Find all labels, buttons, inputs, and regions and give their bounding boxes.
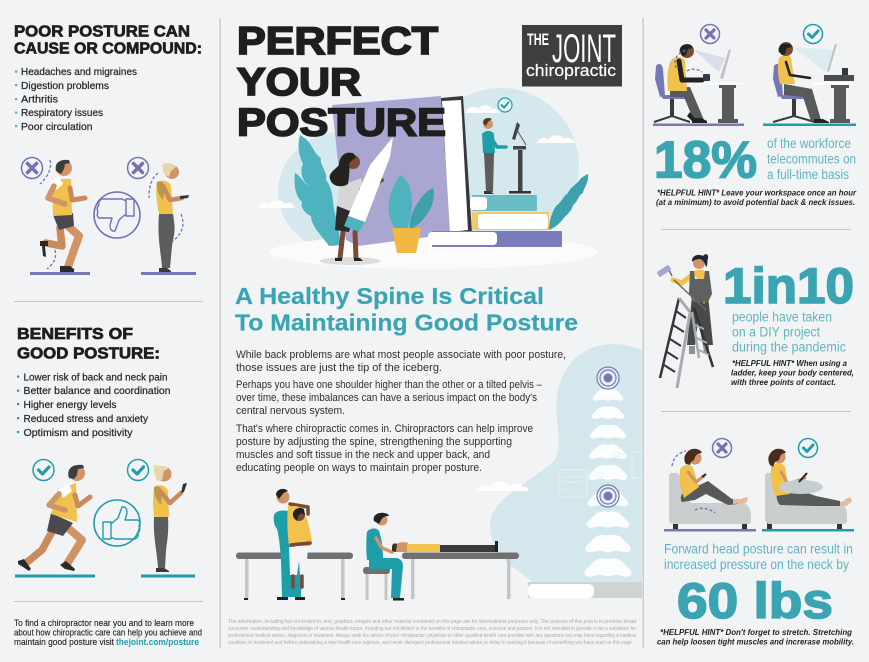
text block: body copy: Perhaps you have one shoulder higher than the other or a tilted pelvis – bbox=[236, 379, 542, 391]
disclaimer: condition or treatment and before undertaking a new health care regimen, and never disregard professional medical advice or delay in seeking it because of something you have read on this page. bbox=[228, 640, 633, 646]
icon: x mark bbox=[712, 438, 732, 458]
list: benefits: Better balance and coordination bbox=[24, 385, 171, 397]
figure: standing chiropractor with patient bbox=[274, 489, 312, 600]
list: problems caused by poor posture: Respiratory issues bbox=[21, 107, 103, 119]
text: workforce stat bbox=[767, 136, 856, 182]
figure: woman holding pencil bbox=[320, 137, 393, 265]
disclaimer bbox=[228, 619, 636, 646]
info card bbox=[559, 452, 642, 497]
vertebrae bbox=[584, 389, 632, 577]
text: DIY stat bbox=[732, 310, 846, 354]
icon: check bbox=[804, 24, 822, 44]
figure: upright at desk bbox=[763, 42, 856, 126]
text: workforce stat: of the workforce bbox=[767, 136, 851, 151]
text: helpful hint ladder: *HELPFUL HINT* When using a bbox=[732, 358, 847, 368]
text: helpful hint ladder: with three points of contact. bbox=[731, 377, 836, 387]
text block: body copy: over time, these imbalances can have a serious impact on the body's bbox=[236, 392, 538, 404]
heading: benefits of good posture bbox=[17, 326, 160, 362]
leaves left bbox=[294, 135, 340, 246]
list: problems caused by poor posture: Digestion problems bbox=[21, 80, 109, 92]
callout: find a chiropractor: To find a chiropractor near you and to learn more bbox=[14, 618, 194, 628]
list: problems caused by poor posture: Poor circulation bbox=[21, 121, 93, 133]
stat: 60 lbs: 60 lbs bbox=[677, 573, 833, 629]
text: helpful hint workspace: (at a minimum) to avoid potential back & neck issues. bbox=[656, 197, 855, 207]
logo: JOINT bbox=[552, 27, 616, 71]
ground line teal bbox=[763, 124, 856, 126]
callout: find a chiropractor: maintain good posture visit bbox=[14, 637, 114, 647]
ground ellipse bbox=[270, 235, 598, 269]
icon: thumbs up bbox=[94, 500, 140, 546]
callout: find a chiropractor: about how chiropractic care can help you achieve and bbox=[14, 628, 202, 638]
title: PERFECT bbox=[237, 20, 438, 63]
text block: body copy: While back problems are what most people associate with poor posture, bbox=[236, 349, 566, 361]
title bbox=[237, 20, 446, 144]
disclaimer: professional medical advice, diagnosis or treatment. Always seek the advice of your chiropractor, physician or other qualified health care provider with any questions you may have regarding a medical bbox=[228, 633, 636, 639]
text block: body copy bbox=[236, 349, 566, 474]
logo: THE bbox=[527, 30, 549, 49]
target marker bottom bbox=[597, 485, 619, 507]
ground line teal bbox=[141, 574, 195, 578]
book edge bbox=[441, 96, 472, 235]
heading: healthy spine bbox=[235, 283, 578, 336]
text block: body copy: posture by adjusting the spine, strengthening the supporting bbox=[236, 436, 512, 448]
figure: lying patient bbox=[392, 541, 498, 552]
table left bbox=[236, 552, 353, 600]
ground line teal bbox=[15, 574, 95, 578]
figure: upright on chaise bbox=[762, 449, 854, 532]
text: workforce stat: a full-time basis bbox=[767, 167, 849, 182]
icon: x mark bbox=[700, 24, 720, 44]
icon: x mark left bbox=[22, 158, 42, 178]
text: helpful hint stretch: *HELPFUL HINT* Don't forget to stretch. Stretching bbox=[660, 627, 853, 637]
icon: check left bbox=[33, 460, 54, 480]
figure: slouched on chaise bbox=[664, 449, 756, 532]
list: problems caused by poor posture: Arthritis bbox=[21, 94, 58, 106]
logo bbox=[522, 25, 622, 86]
text: forward head stat: Forward head posture can result in bbox=[664, 542, 853, 556]
title: YOUR bbox=[237, 61, 361, 104]
text block: body copy: those issues are just the tip of the iceberg. bbox=[236, 362, 442, 374]
clouds bbox=[258, 105, 575, 208]
list: benefits: Higher energy levels bbox=[24, 399, 116, 411]
icon: check bbox=[798, 438, 818, 458]
text: forward head stat: increased pressure on the neck by bbox=[664, 557, 849, 572]
panel: DIY bbox=[656, 254, 854, 388]
icon: check above man bbox=[498, 98, 512, 112]
heading: poor posture can cause or compound bbox=[14, 24, 202, 58]
open book page bbox=[332, 96, 451, 246]
list: benefits: Optimism and positivity bbox=[24, 427, 133, 439]
ground line purple bbox=[141, 272, 196, 275]
text: DIY stat: during the pandemic bbox=[732, 340, 846, 354]
stool bbox=[363, 567, 390, 600]
text: helpful hint ladder bbox=[731, 358, 854, 387]
stat: 18%: 18% bbox=[654, 132, 757, 190]
ground line teal bbox=[762, 529, 854, 532]
list: problems caused by poor posture bbox=[15, 66, 137, 133]
ladder bbox=[660, 298, 713, 388]
logo: chiropractic bbox=[526, 61, 617, 80]
icon: thumbs down bbox=[94, 192, 140, 238]
title: POSTURE bbox=[237, 102, 446, 144]
figure: slouched at desk bbox=[653, 44, 744, 126]
heading: poor posture can cause or compound: CAUSE OR COMPOUND: bbox=[14, 40, 202, 58]
icon: check right bbox=[128, 460, 148, 480]
background blob bbox=[278, 88, 579, 252]
list: benefits: Lower risk of back and neck pain bbox=[24, 372, 168, 384]
text: forward head stat bbox=[664, 542, 853, 572]
text block: body copy: central nervous system. bbox=[236, 405, 345, 417]
list: benefits bbox=[17, 372, 171, 439]
callout: find a chiropractor: thejoint.com/posture bbox=[116, 637, 199, 647]
text: helpful hint stretch: can help loosen tight muscles and increrase mobility. bbox=[657, 636, 854, 646]
heading: healthy spine: To Maintaining Good Posture bbox=[235, 310, 578, 336]
ground line purple bbox=[664, 529, 756, 532]
stacked books bbox=[428, 195, 562, 247]
callout: find a chiropractor bbox=[14, 618, 202, 647]
heading: poor posture can cause or compound: POOR POSTURE CAN bbox=[14, 24, 190, 40]
heading: benefits of good posture: GOOD POSTURE: bbox=[17, 346, 160, 362]
figure: woman painting on ladder bbox=[656, 254, 713, 388]
illustration: chiropractors at work bbox=[236, 489, 519, 600]
text: helpful hint workspace bbox=[656, 188, 857, 207]
text: helpful hint stretch bbox=[657, 627, 854, 646]
text: DIY stat: people have taken bbox=[732, 310, 832, 324]
figure: slouched runner bbox=[30, 160, 90, 275]
figure: upright runner bbox=[15, 465, 95, 578]
text: helpful hint ladder: ladder, keep your body centered, bbox=[731, 368, 854, 378]
disclaimer: The information, including but not limited to, text, graphics, images and other material contained on this page are for informational purposes only. The purpose of this post is to promote broad bbox=[228, 619, 636, 625]
list: problems caused by poor posture: Headaches and migraines bbox=[21, 66, 137, 78]
heading: healthy spine: A Healthy Spine Is Critical bbox=[235, 283, 544, 309]
panel: spine illustration bbox=[476, 344, 642, 598]
right leaf bbox=[549, 174, 588, 230]
book under spine bbox=[528, 582, 642, 598]
text block: body copy: muscles and soft tissue in the neck and upper back, and bbox=[236, 449, 490, 461]
figure: upright woman with phone bbox=[141, 465, 195, 578]
list: benefits: Reduced stress and anxiety bbox=[24, 413, 149, 425]
panel: poor posture bbox=[14, 24, 202, 275]
potted plant bbox=[388, 175, 434, 253]
cloud bbox=[476, 482, 529, 491]
icon: x mark right bbox=[128, 158, 148, 178]
panel: forward head posture bbox=[657, 438, 854, 646]
text block: body copy: educating people on ways to maintain proper posture. bbox=[236, 462, 482, 474]
figure: seated chiropractor bbox=[366, 513, 404, 600]
text block: body copy: That's where chiropractic comes in. Chiropractors can help improve bbox=[236, 423, 533, 435]
table right bbox=[402, 552, 519, 599]
target marker top bbox=[597, 367, 619, 389]
panel: hero illustration bbox=[258, 88, 598, 269]
figure: slouched woman with phone bbox=[141, 163, 196, 275]
panel: telecommuting bbox=[653, 24, 857, 207]
ground line purple bbox=[30, 272, 90, 275]
text: workforce stat: telecommutes on bbox=[767, 152, 856, 166]
heading: benefits of good posture: BENEFITS OF bbox=[17, 326, 133, 343]
text: DIY stat: on a DIY project bbox=[732, 324, 820, 340]
figure: man at standing desk bbox=[482, 118, 531, 194]
ground line purple bbox=[653, 124, 744, 126]
disclaimer: consumer understanding and knowledge of various health topics, including but not limited to the benefits of chiropractic care, exercise and posture. It is not intended to provide or be a substitute for bbox=[228, 626, 636, 632]
spine silhouette bbox=[490, 344, 642, 582]
panel: benefits of good posture bbox=[14, 326, 202, 647]
stat: 1 in 10: 1in10 bbox=[723, 258, 854, 314]
